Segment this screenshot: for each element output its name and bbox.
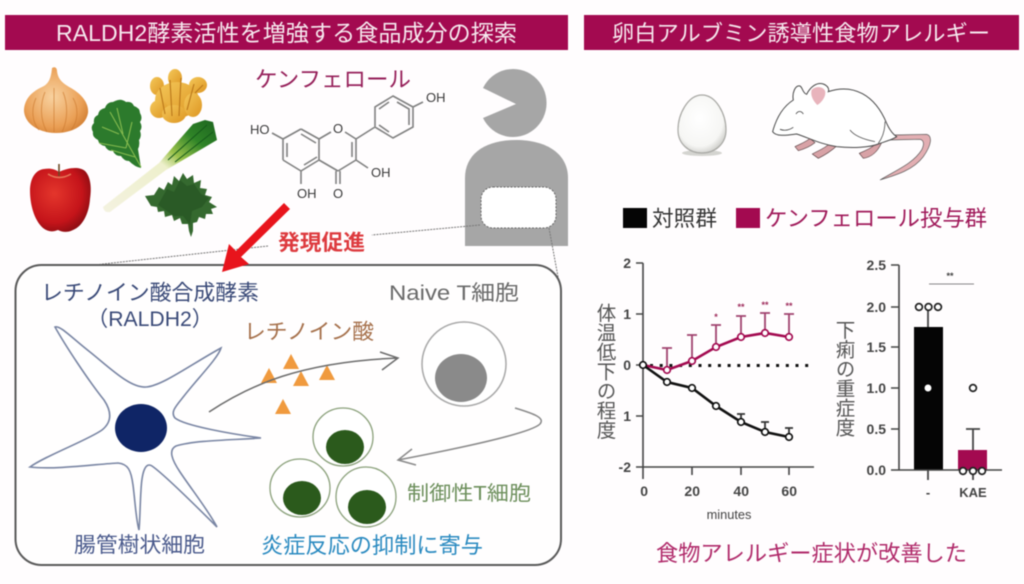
- error bars: [662, 313, 794, 370]
- y axis title: 下痢の重症度: [832, 320, 855, 437]
- arrow: naive T cell to regulatory T cells: [398, 408, 541, 465]
- icon: apple: [30, 164, 91, 232]
- chart: kaempferol molecule: O: [333, 186, 343, 201]
- icon: retinoic acid triangles: [261, 354, 335, 414]
- axis tick labels: 1: [623, 306, 631, 322]
- label: retinoic acid synthase: レチノイン酸合成酵素: [41, 281, 259, 305]
- connector lines: zoom from gut: [48, 225, 561, 293]
- chart: kaempferol molecule: [250, 90, 446, 201]
- bar: control: [914, 327, 943, 470]
- axis tick labels: 1: [623, 408, 631, 424]
- panel: left header: [5, 15, 568, 50]
- axis tick labels: 0: [640, 483, 648, 499]
- panel: left header: RALDH2酵素活性を増強する食品成分の探索: [56, 20, 517, 46]
- dotted baseline: [650, 364, 814, 367]
- panel: right header: 卵白アルブミン誘導性食物アレルギー: [612, 21, 990, 46]
- arrow: retinoic acid to naive T cell: [209, 352, 398, 412]
- axis tick labels: 2.0: [867, 299, 886, 315]
- axis tick labels: 0: [623, 357, 631, 373]
- heading: kaempferol: ケンフェロール: [255, 67, 411, 92]
- x axis title: minutes: [707, 507, 751, 522]
- panel: right header: [584, 15, 1019, 50]
- legend item: control group: 対照群: [652, 207, 717, 231]
- significance stars: [714, 300, 793, 322]
- bar: KAE: [958, 450, 987, 470]
- icon: egg: [678, 95, 726, 156]
- axis tick labels: 1.5: [867, 339, 886, 355]
- label: intestinal dendritic cell: 腸管樹状細胞: [74, 534, 205, 557]
- icon: onion: [24, 67, 88, 133]
- axis tick labels: [619, 255, 797, 499]
- legend item: control group: [623, 207, 717, 231]
- axis tick labels: 2.5: [867, 257, 886, 273]
- data points: [916, 304, 985, 474]
- category labels: -: [926, 485, 930, 500]
- axes: [891, 265, 1002, 470]
- chart: body temperature line chart: [593, 255, 814, 522]
- error bars: [928, 307, 980, 480]
- chart: kaempferol molecule: HO: [250, 122, 270, 137]
- chart: kaempferol molecule: OH: [297, 186, 316, 201]
- axis tick labels: 40: [733, 483, 749, 499]
- significance stars: **: [785, 301, 793, 311]
- category labels: [926, 485, 987, 500]
- significance stars: **: [737, 302, 745, 312]
- kaempferol series: [643, 330, 792, 373]
- label: naive T cell: Naive T細胞: [389, 282, 519, 305]
- label: promotes expression: 発現促進: [278, 231, 365, 255]
- conclusion: food allergy symptoms improved: 食物アレルギー症状が改善した: [656, 541, 967, 566]
- significance stars: **: [761, 300, 769, 310]
- icon: mouse: [773, 83, 930, 180]
- icon: naive T cell: [422, 322, 506, 406]
- axis tick labels: 0.5: [867, 421, 886, 437]
- arrow: promotes expression: [222, 203, 290, 272]
- chart: kaempferol molecule: OH: [371, 165, 390, 180]
- icon: regulatory T cells: [270, 408, 396, 527]
- label: contributes to suppressing inflammation: 炎症反応の抑制に寄与: [261, 533, 483, 558]
- label: retinoic acid synthase: [41, 281, 259, 331]
- significance bracket: **: [946, 271, 954, 281]
- icon: ginger: [150, 69, 207, 123]
- label: retinoic acid: レチノイン酸: [244, 320, 374, 344]
- label: retinoic acid synthase: （RALDH2）: [87, 308, 213, 331]
- axis tick labels: 60: [781, 483, 797, 499]
- icon: parsley: [145, 173, 217, 237]
- legend item: kaempferol group: ケンフェロール投与群: [765, 206, 987, 231]
- icon: leek: [103, 120, 217, 212]
- axis tick labels: 1.0: [867, 380, 886, 396]
- chart: kaempferol molecule: OH: [426, 90, 446, 105]
- illustration: foods: [24, 67, 217, 237]
- icon: lettuce: [92, 100, 142, 168]
- icon: person eating: [465, 69, 568, 246]
- significance bracket: [929, 271, 974, 284]
- significance stars: *: [714, 312, 718, 322]
- axis tick labels: -2: [619, 459, 631, 475]
- category labels: KAE: [959, 485, 987, 500]
- axis tick labels: 0.0: [867, 462, 886, 478]
- axes: [636, 263, 814, 479]
- chart: diarrhea severity bar chart: [832, 257, 1002, 500]
- axis tick labels: [867, 257, 886, 478]
- label: regulatory T cell: 制御性T細胞: [407, 482, 531, 505]
- y axis title: 体温低下の程度: [593, 303, 616, 440]
- panel: gut mechanism: [16, 265, 561, 565]
- icon: dendritic cell: [30, 327, 261, 530]
- axis tick labels: 2: [623, 255, 631, 271]
- legend: [623, 206, 987, 231]
- control series: [640, 362, 792, 440]
- axis tick labels: 20: [684, 483, 700, 499]
- chart: kaempferol molecule: O: [333, 121, 343, 136]
